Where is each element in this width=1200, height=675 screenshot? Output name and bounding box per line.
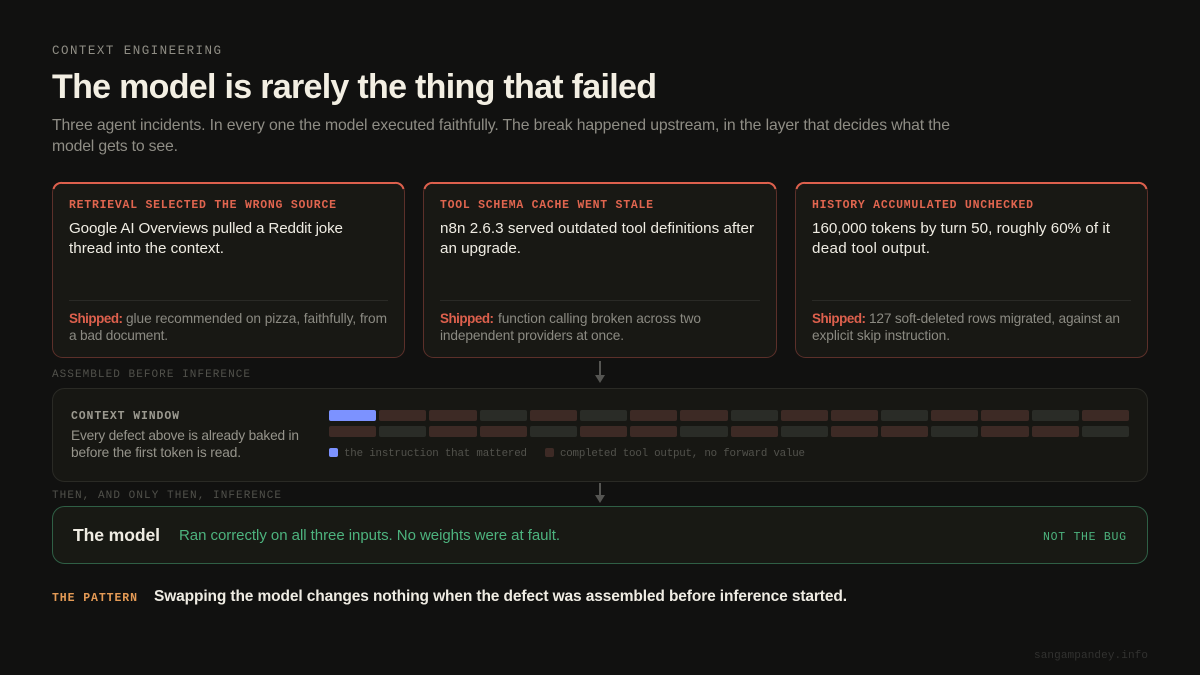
- panel: tool schema incident: [424, 182, 776, 358]
- shipped outcome: a bad document.: [69, 328, 168, 343]
- context window heading: CONTEXT WINDOW: [71, 410, 179, 423]
- section label: then inference: THEN, AND ONLY THEN, INFERENCE: [52, 490, 281, 502]
- shipped outcome: Shipped:: [812, 311, 866, 326]
- panel: context window: [52, 388, 1148, 482]
- subtitle: Three agent incidents. In every one the model executed faithfully. The break happened upstream, in the layer that decides what the: [52, 117, 950, 134]
- pattern label: THE PATTERN: [52, 592, 137, 605]
- context window description: Every defect above is already baked in: [71, 428, 299, 443]
- arrow: context window to model: [595, 483, 605, 503]
- card description: thread into the context.: [69, 240, 224, 257]
- shipped outcome: Shipped:: [440, 311, 494, 326]
- subtitle: model gets to see.: [52, 138, 178, 155]
- arrow: cards to context window: [595, 361, 605, 383]
- shipped outcome: Shipped:: [69, 311, 123, 326]
- pattern statement: Swapping the model changes nothing when the defect was assembled before inference started.: [154, 588, 847, 605]
- legend: instruction: the instruction that mattered: [344, 448, 527, 460]
- not the bug tag: NOT THE BUG: [1043, 531, 1126, 544]
- title: The model is rarely the thing that failed: [52, 68, 657, 106]
- shipped outcome: function calling broken across two: [498, 311, 701, 326]
- shipped outcome: 127 soft-deleted rows migrated, against an: [869, 311, 1120, 326]
- card description: n8n 2.6.3 served outdated tool definitions after: [440, 220, 754, 237]
- card description: dead tool output.: [812, 240, 930, 257]
- card label: HISTORY ACCUMULATED UNCHECKED: [812, 199, 1033, 212]
- eyebrow: CONTEXT ENGINEERING: [52, 44, 221, 58]
- card description: Google AI Overviews pulled a Reddit joke: [69, 220, 343, 237]
- context window description: before the first token is read.: [71, 445, 241, 460]
- panel: the model: [52, 506, 1148, 564]
- card description: [440, 220, 754, 257]
- card label: TOOL SCHEMA CACHE WENT STALE: [440, 199, 653, 212]
- shipped outcome: glue recommended on pizza, faithfully, from: [126, 311, 387, 326]
- card label: RETRIEVAL SELECTED THE WRONG SOURCE: [69, 199, 336, 212]
- shipped outcome: explicit skip instruction.: [812, 328, 950, 343]
- panel: retrieval incident: [52, 182, 404, 358]
- token bar rows: [329, 410, 1129, 437]
- model name: The model: [73, 525, 160, 545]
- card description: [69, 220, 343, 257]
- card description: 160,000 tokens by turn 50, roughly 60% of it: [812, 220, 1111, 237]
- shipped outcome: [440, 311, 701, 343]
- card description: an upgrade.: [440, 240, 521, 257]
- model verdict: Ran correctly on all three inputs. No weights were at fault.: [179, 527, 560, 544]
- legend: tool output: completed tool output, no forward value: [560, 448, 805, 460]
- shipped outcome: independent providers at once.: [440, 328, 624, 343]
- panel: history incident: [796, 182, 1148, 358]
- card description: [812, 220, 1111, 257]
- subtitle: [52, 117, 950, 155]
- section label: assembled before inference: ASSEMBLED BEFORE INFERENCE: [52, 369, 250, 381]
- context window description: [71, 428, 299, 460]
- footer credit: sangampandey.info: [1034, 650, 1148, 662]
- shipped outcome: [812, 311, 1120, 343]
- shipped outcome: [69, 311, 387, 343]
